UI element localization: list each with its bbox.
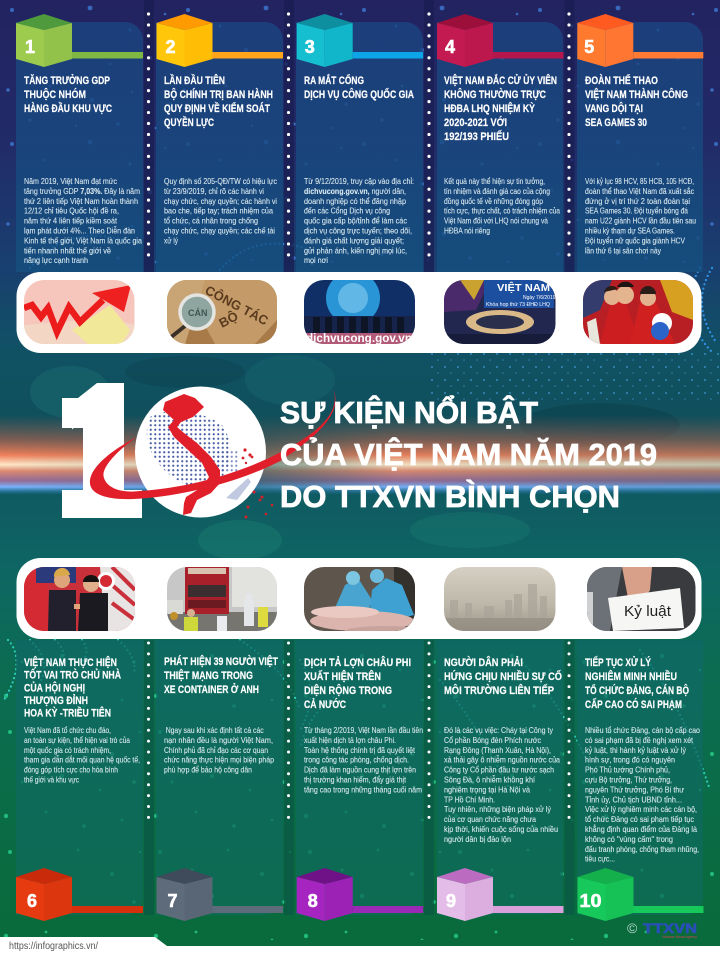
heading 9: HỨNG CHỊU NHIỀU SỰ CỐ	[444, 669, 562, 683]
body text 8: Từ tháng 2/2019, Việt Nam lần đầu tiên	[304, 726, 423, 735]
body text 8	[304, 726, 423, 794]
body text 1: năm thứ 4 liên tiếp kiềm soát	[24, 217, 118, 226]
title text: SỰ KIỆN NỔI BẬT	[280, 394, 538, 430]
body text 6: một quốc gia có trách nhiệm,	[24, 746, 111, 755]
body text 6	[24, 725, 140, 784]
heading 9: MÔI TRƯỜNG LIÊN TIẾP	[444, 684, 554, 697]
body text 6: đóng góp tích cực cho hòa bình	[24, 766, 118, 775]
body text 9: Đó là các vụ việc: Cháy tại Công ty	[444, 726, 554, 735]
photo: public service portal launch	[304, 280, 415, 344]
heading 10: TIẾP TỤC XỬ LÝ	[585, 656, 652, 669]
heading 6: HOA KỲ -TRIỀU TIÊN	[24, 706, 111, 720]
cube 4	[437, 14, 564, 67]
cube 1: 1	[25, 37, 35, 57]
heading 7: THIỆT MẠNG TRONG	[164, 669, 253, 682]
body text 3	[304, 177, 414, 265]
cube 4: 4	[445, 37, 455, 57]
body text 5: đứng ở vị trí thứ 2 toàn đoàn tại	[585, 197, 690, 206]
heading 4: VIỆT NAM ĐẮC CỬ ỦY VIÊN	[444, 74, 557, 87]
heading 4: HĐBA LHQ NHIỆM KỲ	[444, 102, 536, 115]
panel 9: environmental incidents	[437, 640, 564, 921]
body text 3: Từ 9/12/2019, truy cập vào địa chỉ:	[304, 177, 414, 186]
heading 10: NGHIÊM MINH NHIỀU	[585, 670, 677, 683]
body text 10: đấu tranh phòng, chống tham nhũng,	[585, 845, 699, 854]
globe with Vietnam map	[135, 386, 273, 518]
body text 5: lần thứ 6 tại sân chơi này	[585, 246, 662, 255]
heading 4: 2020-2021 VỚI	[444, 116, 507, 129]
body text 10: không có "vùng cấm" trong	[585, 835, 673, 844]
heading 5	[585, 74, 688, 129]
logo: TTXVN: ©	[627, 920, 638, 936]
body text 7: nạn nhân đều là người Việt Nam,	[164, 736, 273, 745]
heading 1	[24, 74, 112, 115]
body text 10: tiêu cực...	[585, 855, 615, 864]
heading 7: XE CONTAINER Ở ANH	[164, 683, 259, 696]
cube 8	[297, 868, 423, 921]
heading 8: DỊCH TẢ LỢN CHÂU PHI	[304, 656, 411, 669]
footer: https://infographics.vn/	[9, 941, 98, 952]
body text 1: năng lực cạnh tranh	[24, 256, 88, 265]
body text 2	[164, 177, 277, 245]
panel 6: US-DPRK summit host	[16, 640, 143, 921]
cube 9	[437, 868, 564, 921]
photo: swine fever	[304, 567, 415, 631]
body text 8: xuất hiện dịch tả lợn châu Phi.	[304, 736, 396, 745]
body text 1: thứ 2 liên tiếp Việt Nam hoàn thành	[24, 197, 138, 206]
body text 1: tăng trưởng GDP 7,03%. Đây là năm	[24, 187, 140, 196]
heading 6	[24, 656, 121, 720]
body text 10: có sai phạm đã bị đề nghị xem xét	[585, 736, 694, 745]
body text 9: xả thải gây ô nhiễm nguồn nước của	[444, 755, 560, 765]
heading 6: TỐT VAI TRÒ CHỦ NHÀ	[24, 668, 121, 682]
body text 3: gửi phản ánh, kiến nghị mọi lúc,	[304, 246, 407, 255]
title text: DO TTXVN BÌNH CHỌN	[280, 479, 620, 514]
body text 10: khẳng định quan điểm của Đảng là	[585, 823, 697, 834]
title text: CỦA VIỆT NAM NĂM 2019	[280, 436, 657, 472]
cube 5	[577, 14, 703, 67]
panel 2: anti-corruption regulation	[156, 14, 283, 272]
body text 6: Việt Nam đã tổ chức chu đáo,	[24, 725, 111, 735]
cube 9: 9	[446, 891, 456, 911]
body text 3: quốc gia cấp bộ/tỉnh để làm các	[304, 216, 407, 226]
body text 2: bao che, tiếp tay; trách nhiệm của	[164, 207, 273, 216]
body text 2: xử lý	[164, 236, 179, 245]
body text 10: Nhiều tổ chức Đảng, cán bộ cấp cao	[585, 725, 700, 735]
body text 10: Việc xử lý nghiêm minh các cán bộ,	[585, 805, 697, 814]
cube 1	[16, 14, 143, 67]
body text 9: kịp thời, khiến cuộc sống của nhiều	[444, 825, 558, 834]
photo: UN Security Council: Khóa họp thứ 73 ĐHĐ LHQ	[486, 302, 550, 308]
body text 1: Kinh tế thế giới, Việt Nam là quốc gia	[24, 236, 142, 245]
heading 2: LẦN ĐẦU TIÊN	[164, 74, 225, 87]
body text 7	[164, 726, 274, 775]
body text 3: doanh nghiệp có thể đăng nhập	[304, 196, 406, 206]
body text 4: tín nhiệm và đánh giá cao của cộng	[444, 187, 550, 196]
cube 5: 5	[584, 37, 594, 57]
panel 1: GDP growth	[16, 14, 143, 272]
cube 6	[16, 868, 143, 921]
heading 8: DIỆN RỘNG TRONG	[304, 684, 392, 697]
column separators bottom	[144, 640, 574, 915]
heading 2	[164, 74, 273, 129]
body text 9: Công ty Cổ phần đầu tư nước sạch	[444, 765, 554, 775]
body text 9: nghiêm trọng tại Hà Nội và	[444, 785, 530, 794]
heading 1: TĂNG TRƯỞNG GDP	[24, 74, 110, 87]
cube 2	[156, 14, 283, 67]
body text 5: nhiều kỳ tham dự SEA Games.	[585, 226, 675, 236]
photo: UN Security Council	[444, 280, 557, 344]
body text 2: tổ chức, cá nhân trong chống	[164, 216, 258, 226]
body text 5: đoàn thể thao Việt Nam đã xuất sắc	[585, 186, 694, 196]
body text 6: an toàn sự kiện, thể hiện vai trò của	[24, 735, 130, 745]
body text 8: trong công tác phòng, chống dịch.	[304, 756, 409, 765]
heading 8: XUẤT HIỆN TRÊN	[304, 670, 381, 683]
cube 7	[156, 868, 283, 921]
heading 6: CỦA HỘI NGHỊ	[24, 681, 85, 694]
photo strip top	[16, 271, 702, 353]
panel 7: 39 victims in UK container	[156, 640, 283, 921]
heading 9	[444, 656, 562, 697]
body text 3: mọi nơi	[304, 256, 328, 265]
panel 10: discipline of party officials	[577, 640, 704, 921]
heading 8: CẢ NƯỚC	[304, 698, 346, 711]
photo: public service portal launch: dichvucong.gov.vn	[306, 331, 412, 345]
body text 9: TP Hồ Chí Minh.	[444, 795, 495, 804]
heading 6: THƯỢNG ĐỈNH	[24, 694, 88, 707]
body text 2: Quy định số 205-QĐ/TW có hiệu lực	[164, 177, 277, 186]
logo: TTXVN: TTXVN	[643, 920, 697, 936]
heading 9: NGƯỜI DÂN PHẢI	[444, 656, 523, 669]
heading 1: THUỘC NHÓM	[24, 88, 86, 101]
heading 6: VIỆT NAM THỰC HIỆN	[24, 656, 117, 669]
body text 7: Chính phủ đã chỉ đạo các cơ quan	[164, 746, 268, 755]
body text 2: chạy chức, chạy quyền; các chế tài	[164, 226, 275, 236]
body text 1: Năm 2019, Việt Nam đạt mức	[24, 177, 117, 186]
photo: cadre work: BỘ	[216, 308, 241, 331]
body text 9: Sông Đà, ô nhiễm không khí	[444, 774, 536, 784]
body text 2: chạy chức, chạy quyền; các hành vi	[164, 197, 277, 206]
body text 10: hình sự, trong đó có nguyên	[585, 756, 675, 765]
panel 4: UN Security Council seat	[437, 14, 564, 272]
body text 9: Tuy nhiên, những biện pháp xử lý	[444, 805, 552, 814]
cube 3	[297, 14, 423, 67]
photo: cadre work: CÁN	[188, 308, 208, 318]
body text 4: Việt Nam đối với LHQ nói chung và	[444, 217, 548, 226]
heading 2: BỘ CHÍNH TRỊ BAN HÀNH	[164, 88, 273, 101]
body text 5: SEA Games 30. Đội tuyển bóng đá	[585, 206, 688, 216]
cube 7: 7	[168, 891, 178, 911]
heading 3: DỊCH VỤ CÔNG QUỐC GIA	[304, 87, 414, 101]
photo: SEA Games athletes	[583, 280, 693, 344]
body text 9: của cơ quan chức năng chưa	[444, 815, 536, 824]
panel 5: SEA Games 30	[577, 14, 703, 272]
photo: cadre work: CÔNG TÁC	[203, 282, 271, 328]
heading 2: QUY ĐỊNH VỀ KIỂM SOÁT	[164, 102, 270, 115]
photo: UN Security Council: Ngày 7/6/2019,	[523, 295, 557, 301]
body text 8: Toàn hệ thống chính trị đã quyết liệt	[304, 746, 416, 755]
body text 4	[444, 176, 560, 236]
body text 5: nam U22 giành HCV lần đầu tiên sau	[585, 217, 696, 226]
heading 2: QUYỀN LỰC	[164, 116, 214, 129]
photo: cadre work	[167, 280, 277, 344]
body text 7: Ngay sau khi xác định tất cả các	[166, 726, 264, 735]
heading 4: KHÔNG THƯỜNG TRỰC	[444, 88, 546, 101]
heading 5: ĐOÀN THỂ THAO	[585, 74, 658, 87]
heading 1: HÀNG ĐẦU KHU VỰC	[24, 102, 112, 115]
body text 10: kỷ luật, thi hành kỷ luật và xử lý	[585, 746, 687, 755]
title text	[280, 394, 657, 514]
photo strip bottom	[16, 558, 702, 639]
body text 4: Kết quả này thể hiện sự tin tưởng,	[444, 176, 545, 186]
body text 3: dichvucong.gov.vn, người dân,	[304, 187, 406, 196]
panel 3: national public service portal	[296, 14, 423, 272]
body text 9: Rạng Đông (Thanh Xuân, Hà Nội),	[444, 746, 551, 755]
body text 8: Dịch đã làm nguồn cung thịt lợn trên	[304, 766, 416, 775]
body text 4: tích cực, thực chất, có trách nhiệm của	[444, 207, 560, 216]
body text 10	[585, 725, 700, 864]
body text 4: đồng quốc tế về những đóng góp	[444, 197, 543, 206]
photo: discipline sign: Kỷ luật	[624, 603, 672, 620]
footer	[0, 937, 720, 953]
body text 9: người dân bị đảo lộn	[444, 835, 511, 844]
body text 3: dịch vụ công trực tuyến; theo dõi,	[304, 226, 412, 236]
column separators top	[144, 0, 574, 272]
cube 2: 2	[166, 37, 176, 57]
logo: TTXVN	[627, 920, 697, 939]
cube 3: 3	[305, 37, 315, 57]
photo: UN Security Council: VIỆT NAM	[497, 281, 550, 294]
photo: US-DPRK summit	[24, 567, 135, 631]
logo: TTXVN: Vietnam News Agency	[662, 934, 697, 939]
body text 2: từ 23/9/2019, chỉ rõ các hành vi	[164, 187, 264, 196]
heading 4	[444, 74, 557, 143]
heading 10	[585, 656, 689, 711]
heading 4: 192/193 PHIẾU	[444, 130, 509, 143]
body text 4: HĐBA nói riêng	[444, 226, 490, 236]
heading 8	[304, 656, 411, 711]
body text 1: 12/12 chỉ tiêu Quốc hội đề ra,	[24, 207, 119, 216]
body text 8: thị trường khan hiếm, đẩy giá thịt	[304, 774, 407, 784]
cube 10: 10	[580, 891, 602, 911]
photo: growth arrow	[24, 280, 135, 344]
heading 5: SEA GAMES 30	[585, 117, 647, 129]
photo: city smog	[444, 567, 556, 631]
body text 3: đến các Cổng Dịch vụ công	[304, 206, 390, 216]
heading 3	[304, 74, 414, 101]
body text 7: chức năng thực hiện mọi biện pháp	[164, 756, 274, 765]
body text 10: nguyên Thứ trưởng, Phó Bí thư	[585, 785, 684, 794]
cube 6: 6	[27, 891, 37, 911]
body text 10: Tỉnh ủy, Chủ tịch UBND tỉnh...	[585, 795, 682, 804]
body text 1: lạm phát dưới 4%... Theo Diễn đàn	[24, 226, 135, 236]
body text 5: Đội tuyển nữ quốc gia giành HCV	[585, 235, 685, 245]
body text 9: Cổ phần Bóng đèn Phích nước	[444, 735, 541, 745]
body text 5	[585, 177, 696, 255]
big number 1: 1	[64, 355, 130, 547]
body text 6: thế giới và khu vực	[24, 776, 79, 784]
body text 1: tiến nhanh nhất thế giới về	[24, 246, 111, 255]
heading 5: VIỆT NAM THÀNH CÔNG	[585, 88, 688, 101]
body text 1	[24, 177, 142, 265]
photo: container truck	[167, 567, 277, 631]
body text 3: đánh giá chất lượng giải quyết;	[304, 236, 404, 245]
panel 8: African swine fever	[296, 640, 423, 921]
body text 9	[444, 726, 560, 844]
red orbit swoosh	[90, 389, 336, 499]
body text 10: Phó Thủ tướng Chính phủ,	[585, 766, 670, 775]
photo: discipline sign	[587, 567, 696, 631]
body text 6: tham gia dẫn dắt mối quan hệ quốc tế,	[24, 755, 140, 765]
heading 5: VANG DỘI TẠI	[585, 102, 643, 115]
body text 8: tăng cao trong những tháng cuối năm	[304, 785, 422, 794]
cube 8: 8	[308, 891, 318, 911]
body text 10: cựu Bộ trưởng, Thứ trưởng,	[585, 776, 672, 784]
body text 10: tổ chức Đảng có sai phạm tiếp tục	[585, 814, 694, 824]
main title	[62, 383, 656, 518]
heading 7	[164, 655, 278, 696]
heading 10: TỔ CHỨC ĐẢNG, CÁN BỘ	[585, 684, 689, 697]
heading 10: CẤP CAO CÓ SAI PHẠM	[585, 698, 682, 711]
body text 7: phù hợp để bảo hộ công dân	[164, 765, 252, 775]
heading 7: PHÁT HIỆN 39 NGƯỜI VIỆT	[164, 655, 278, 668]
cube 10	[578, 868, 704, 921]
heading 3: RA MẮT CỔNG	[304, 74, 364, 87]
